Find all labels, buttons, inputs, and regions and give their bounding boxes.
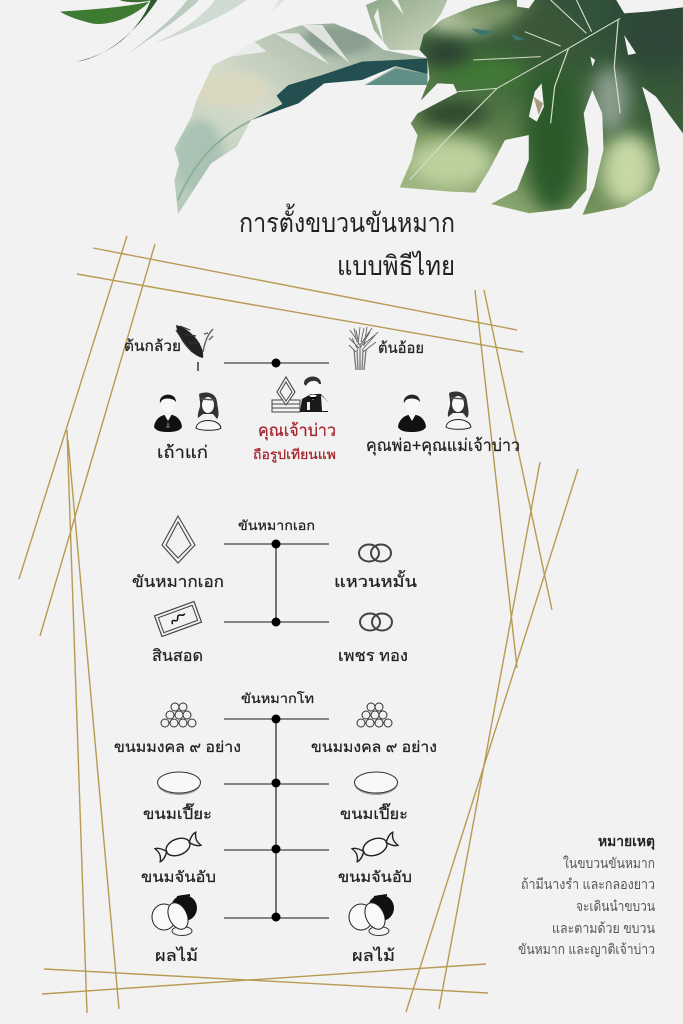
icon: banana tree — [176, 325, 213, 371]
label: nine auspicious sweets right: ขนมมงคล ๙ อย่าง — [311, 739, 437, 756]
banana leaf — [174, 23, 428, 214]
title — [239, 203, 455, 281]
label: fruit left: ผลไม้ — [155, 946, 198, 965]
icon: pia cake left — [158, 772, 200, 795]
label: nine auspicious sweets left: ขนมมงคล ๙ อย่าง — [114, 739, 241, 756]
icon: banknote — [155, 601, 201, 637]
icon: father — [398, 395, 426, 432]
timeline — [224, 540, 329, 626]
icon: fruit left — [152, 895, 197, 936]
label: elders: เถ้าแก่ — [157, 443, 208, 462]
icon: candle tray — [272, 377, 300, 412]
label: engagement ring: แหวนหมั้น — [334, 570, 417, 591]
note block: ถ้ามีนางรำ และกลองยาว — [521, 876, 655, 892]
icon: pia cake right — [354, 772, 398, 795]
leaf holes — [517, 0, 636, 122]
connector line — [224, 358, 329, 368]
icon: elder woman — [196, 393, 221, 430]
label: khanom pia right: ขนมเปี๊ยะ — [340, 803, 408, 823]
icon: sweets pyramid left — [161, 703, 196, 727]
label: fruit right: ผลไม้ — [352, 946, 395, 965]
icon: rings — [359, 544, 391, 562]
section heading: ขันหมากโท — [241, 691, 314, 706]
icon: fruit right — [349, 895, 394, 936]
label: sugar cane: ต้นอ้อย — [378, 340, 424, 357]
title: การตั้งขบวนขันหมาก — [239, 203, 455, 238]
label: groom: คุณเจ้าบ่าว — [258, 421, 336, 441]
note block — [518, 833, 655, 957]
pale leaves — [122, 0, 284, 58]
icon: mother — [446, 392, 471, 429]
gold frame lines — [19, 236, 578, 1013]
section 3: secondary khan maak — [114, 691, 437, 965]
icon: candy right — [352, 831, 398, 863]
icon: groom — [300, 376, 328, 412]
label: khanom pia left: ขนมเปี๊ยะ — [143, 803, 212, 823]
note block: หมายเหตุ — [598, 833, 655, 850]
icon: candy left — [155, 831, 201, 863]
timeline — [224, 714, 329, 922]
section 2: main khan maak — [132, 516, 417, 665]
label: diamond gold: เพชร ทอง — [338, 648, 408, 665]
section 1: procession head — [124, 325, 520, 463]
leaves illustration — [60, 0, 683, 215]
icon: elder man — [154, 395, 182, 432]
label: dowry: สินสอด — [152, 648, 203, 665]
icon: diamond tray — [162, 516, 195, 563]
label: parents: คุณพ่อ+คุณแม่เจ้าบ่าว — [366, 436, 520, 456]
note block: ในขบวนขันหมาก — [563, 855, 655, 871]
label: khanom chan ap left: ขนมจันอับ — [141, 869, 216, 886]
label: khan maak ek: ขันหมากเอก — [132, 574, 224, 591]
note block: จะเดินนำขบวน — [576, 898, 655, 914]
icon: sugar cane — [349, 327, 378, 370]
label: groom holds tray: ถือรูปเทียนแพ — [253, 447, 336, 463]
section heading: ขันหมากเอก — [238, 518, 315, 533]
icon: sweets pyramid right — [357, 703, 392, 727]
note block: ขันหมาก และญาติเจ้าบ่าว — [518, 941, 655, 957]
monstera leaf — [400, 0, 683, 215]
icon: rings — [360, 614, 392, 630]
label: khanom chan ap right: ขนมจันอับ — [338, 869, 412, 886]
label: banana tree: ต้นกล้วย — [124, 338, 181, 355]
title: แบบพิธีไทย — [337, 251, 455, 281]
note block: และตามด้วย ขบวน — [552, 920, 655, 936]
small dark leaves — [60, 0, 157, 62]
back leaf — [366, 0, 447, 50]
leaf veins — [410, 0, 620, 180]
